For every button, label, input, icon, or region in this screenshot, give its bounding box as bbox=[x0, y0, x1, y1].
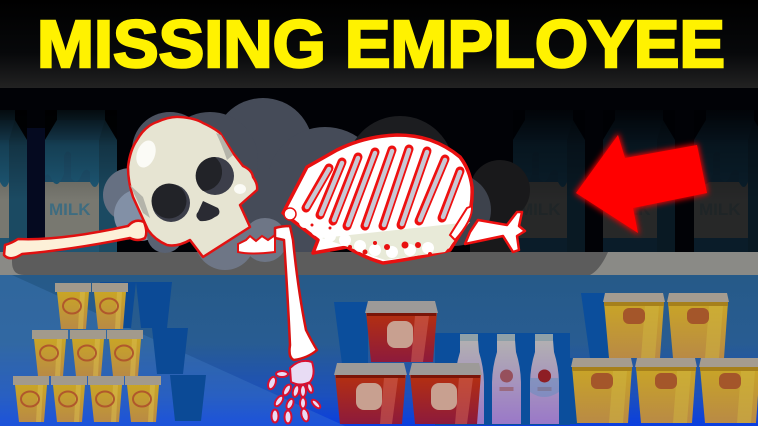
spine segment bbox=[238, 235, 275, 254]
milk cartons: MILK bbox=[49, 200, 91, 219]
title: MISSING EMPLOYEE bbox=[37, 7, 725, 82]
stacked cups left bbox=[13, 283, 161, 422]
title bar bbox=[0, 0, 758, 88]
lower rib tips bbox=[310, 224, 432, 256]
shelf board bbox=[0, 252, 758, 275]
smoke cloud bbox=[103, 98, 530, 270]
background: upper dark shelf bbox=[0, 0, 758, 275]
hand bbox=[266, 361, 322, 424]
skeleton bbox=[4, 117, 525, 423]
dangling arm bbox=[275, 226, 317, 360]
ribcage bbox=[283, 135, 472, 263]
bottles bbox=[455, 334, 559, 424]
milk cartons: MILK bbox=[609, 200, 651, 219]
milk cartons: MILK bbox=[699, 200, 741, 219]
background: lower blue shelf bbox=[0, 275, 758, 426]
yellow boxes right bbox=[571, 293, 758, 423]
milk cartons bbox=[0, 110, 758, 252]
skull bbox=[128, 117, 257, 257]
shelf food: shadows bbox=[100, 282, 620, 425]
red boxes bbox=[334, 301, 482, 424]
milk cartons: MILK bbox=[519, 200, 561, 219]
left arm bone bbox=[4, 221, 146, 258]
right arm bone bbox=[465, 212, 525, 252]
light beam bbox=[0, 275, 345, 426]
red arrow bbox=[576, 135, 707, 233]
lower rib bumps bbox=[299, 216, 434, 258]
